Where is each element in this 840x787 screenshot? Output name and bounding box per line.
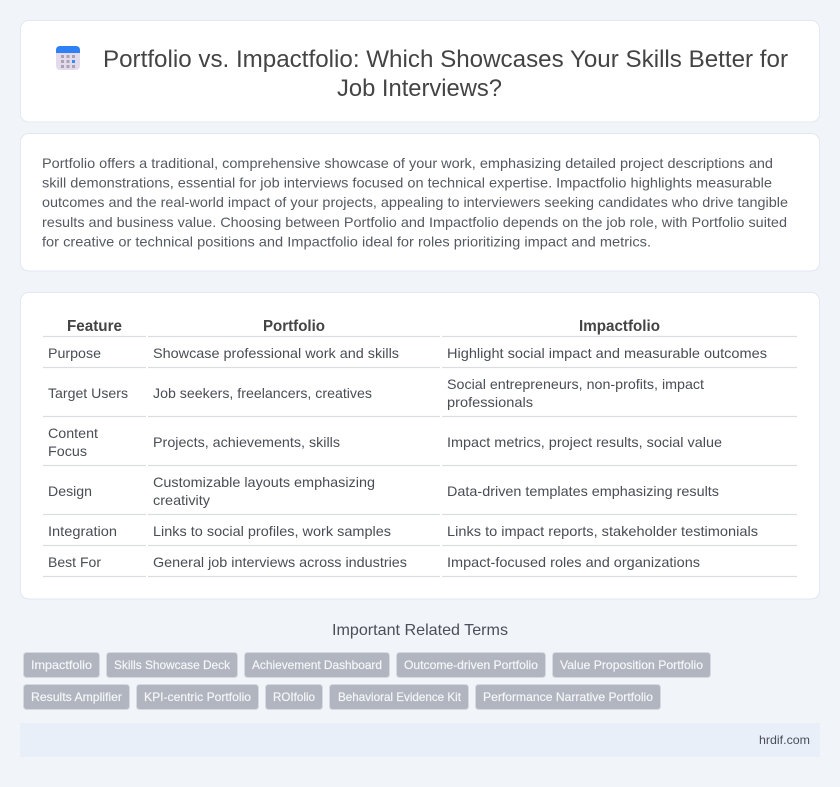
row: integration: Integration	[48, 523, 117, 539]
tag	[330, 684, 468, 710]
tag: Performance Narrative Portfolio	[483, 690, 653, 704]
tag	[552, 652, 710, 678]
tag	[266, 684, 322, 710]
tag: Skills Showcase Deck	[114, 658, 231, 672]
tag: Value Proposition Portfolio	[560, 658, 703, 672]
tag	[106, 652, 238, 678]
text block: summary: results and business value. Choosing between Portfolio and Impactfolio depends on the job role, with Portfolio suited	[42, 214, 787, 230]
text block: summary: Portfolio offers a traditional, comprehensive showcase of your work, emphasizing detailed project descriptions and	[42, 155, 773, 171]
row: integration: Links to social profiles, work samples	[153, 523, 391, 539]
tag	[244, 652, 390, 678]
tag	[136, 684, 258, 710]
tag: Achievement Dashboard	[252, 658, 382, 672]
title: Portfolio vs. Impactfolio: Which Showcases Your Skills Better for	[103, 46, 788, 73]
text block: summary: skill demonstrations, essential for job interviews focused on technical expertise. Impactfolio highlights measurable	[42, 175, 772, 191]
row: target users: Social entrepreneurs, non-profits, impact	[447, 376, 704, 392]
tag	[476, 684, 660, 710]
row: design: Customizable layouts emphasizing	[153, 474, 375, 490]
row: design: creativity	[153, 492, 210, 508]
panel: summary paragraph	[20, 134, 820, 271]
tag: Impactfolio	[31, 658, 92, 672]
title	[103, 46, 788, 102]
table header	[67, 318, 660, 335]
row: best for	[48, 554, 700, 570]
row: best for: Best For	[48, 554, 101, 570]
heading: important related terms: Important Related Terms	[332, 622, 508, 639]
tag: Behavioral Evidence Kit	[338, 690, 462, 704]
row: target users	[48, 376, 704, 410]
row: target users: professionals	[447, 394, 533, 410]
related term tags	[24, 652, 710, 710]
row: integration	[48, 523, 758, 539]
row: content focus: Projects, achievements, skills	[153, 434, 340, 450]
text block: summary: for creative or technical positions and Impactfolio ideal for roles prioritizing impact and metrics.	[42, 233, 651, 249]
row: design	[48, 474, 719, 508]
row: target users: Job seekers, freelancers, creatives	[153, 385, 372, 401]
tag	[24, 652, 100, 678]
row: design: Data-driven templates emphasizing results	[447, 483, 719, 499]
tag	[396, 652, 546, 678]
tag	[24, 684, 130, 710]
tag: KPI-centric Portfolio	[144, 690, 251, 704]
row: content focus	[48, 425, 722, 459]
icon: calendar	[56, 46, 80, 70]
row: design: Design	[48, 483, 92, 499]
row: target users: Target Users	[48, 385, 128, 401]
row: best for: General job interviews across industries	[153, 554, 407, 570]
title: Job Interviews?	[337, 75, 502, 102]
row: content focus: Focus	[48, 443, 87, 459]
row: purpose: Highlight social impact and measurable outcomes	[447, 345, 767, 361]
table header: Portfolio	[263, 318, 325, 335]
table header: Feature	[67, 318, 122, 335]
tag: Results Amplifier	[31, 690, 122, 704]
row: content focus: Content	[48, 425, 98, 441]
text block: summary: outcomes and the real-world impact of your projects, appealing to interviewers seeking candidates who drive tangible	[42, 194, 788, 210]
tag: Outcome-driven Portfolio	[404, 658, 538, 672]
row: purpose: Purpose	[48, 345, 101, 361]
row: best for: Impact-focused roles and organizations	[447, 554, 700, 570]
row: purpose	[48, 345, 767, 361]
row: purpose: Showcase professional work and skills	[153, 345, 399, 361]
table header: Impactfolio	[579, 318, 660, 335]
row: integration: Links to impact reports, stakeholder testimonials	[447, 523, 758, 539]
footer: hrdif.com	[759, 733, 810, 747]
row: content focus: Impact metrics, project results, social value	[447, 434, 722, 450]
panel: comparison table	[20, 292, 820, 599]
text block: summary	[42, 155, 788, 249]
tag: ROIfolio	[273, 690, 315, 704]
footer	[20, 723, 820, 757]
panel: title card	[20, 20, 820, 122]
